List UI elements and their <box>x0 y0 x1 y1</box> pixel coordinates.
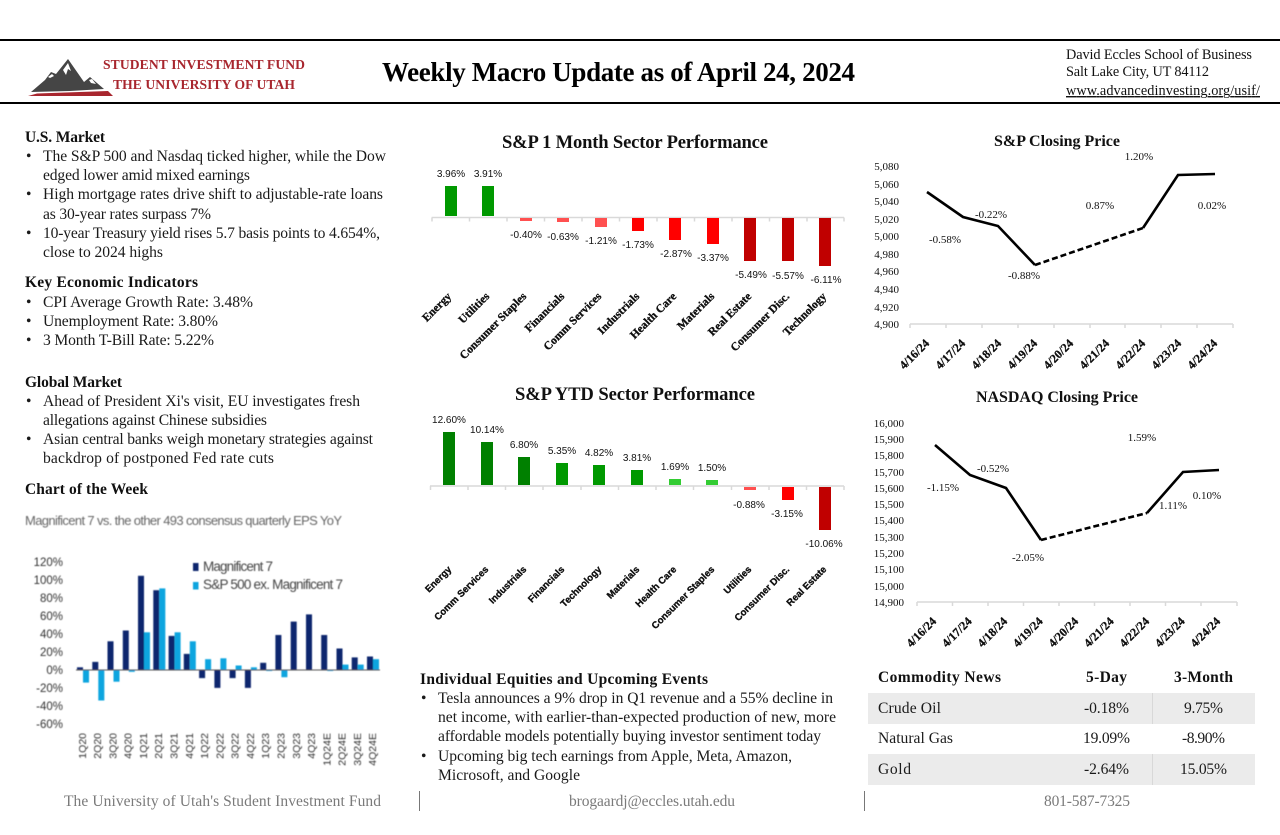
text block: Global Market: allegations against Chinese subsidies <box>43 412 267 429</box>
contact block: www.advancedinvesting.org/usif/ <box>1066 83 1260 99</box>
text block: U.S. Market: • <box>26 225 31 242</box>
bar chart: S&P YTD sector performance: -3.15% <box>771 509 803 520</box>
text block: Individual Equities and Upcoming Events: • <box>421 748 426 765</box>
table: commodity news: 3-Month <box>1174 669 1233 686</box>
table: commodity news: Crude Oil <box>878 700 942 717</box>
line chart: NASDAQ closing price: 4/17/24 <box>939 614 975 650</box>
bar chart: S&P 1 month sector performance: Utilities <box>457 290 492 326</box>
line chart: NASDAQ closing price: 15,600 <box>874 483 904 495</box>
table: commodity news: 19.09% <box>1083 730 1130 747</box>
text block: Global Market: backdrop of postponed Fed rate cuts <box>43 450 274 467</box>
line chart: S&P closing price: 5,040 <box>874 196 900 208</box>
line chart: NASDAQ closing price: 15,400 <box>874 515 904 527</box>
line chart: S&P closing price: 4/22/24 <box>1112 336 1148 372</box>
table: commodity news: 9.75% <box>1184 700 1223 717</box>
text block: U.S. Market: edged lower amid mixed earnings <box>43 167 250 184</box>
x axis quarter labels: 2Q24E <box>336 733 348 766</box>
bar chart: S&P YTD sector performance: 4.82% <box>585 448 613 459</box>
bar chart: S&P 1 month sector performance: -1.73% <box>622 240 654 251</box>
legend <box>193 559 343 592</box>
bar chart: S&P 1 month sector performance: Industrials <box>596 290 642 337</box>
line chart: S&P closing price: 4/24/24 <box>1184 336 1220 372</box>
chart: Magnificent 7 vs other 493 EPS: 20% <box>40 647 63 659</box>
bar chart: S&P YTD sector performance: Comm Services <box>432 564 491 623</box>
line chart: NASDAQ closing price: 4/19/24 <box>1010 614 1046 650</box>
table: commodity news: -8.90% <box>1182 730 1225 747</box>
line chart: NASDAQ closing price <box>874 418 1237 650</box>
line chart: S&P closing price: 4/21/24 <box>1076 336 1112 372</box>
x axis quarter labels: 4Q22 <box>245 733 257 759</box>
bar chart: S&P YTD sector performance <box>423 415 844 632</box>
bar chart: S&P YTD sector performance: 3.81% <box>623 453 651 464</box>
contact block <box>1066 47 1260 99</box>
line chart: S&P closing price: 4,940 <box>874 284 900 296</box>
bar chart: S&P YTD sector performance: 6.80% <box>510 440 538 451</box>
line chart: S&P closing price: -0.58% <box>929 234 961 246</box>
bars: S&P 500 ex. Magnificent 7 <box>83 588 379 700</box>
text block: U.S. Market: close to 2024 highs <box>43 244 163 261</box>
line chart: NASDAQ closing price: 4/18/24 <box>974 614 1010 650</box>
x axis quarter labels: 4Q23 <box>306 733 318 759</box>
x axis quarter labels: 1Q23 <box>260 733 272 759</box>
text block: U.S. Market: • <box>26 186 31 203</box>
bar chart: S&P 1 month sector performance: Comm Services <box>542 290 604 353</box>
text block: Individual Equities and Upcoming Events: Upcoming big tech earnings from Apple, Meta, Amazon, <box>438 748 792 765</box>
text block: Key Economic Indicators: • <box>26 313 31 330</box>
bar chart: S&P 1 month sector performance: -1.21% <box>585 236 617 247</box>
chart: Magnificent 7 vs other 493 EPS: 40% <box>40 629 63 641</box>
bar chart: S&P 1 month sector performance: Consumer Disc. <box>729 291 792 354</box>
line chart: NASDAQ closing price: 15,800 <box>874 450 904 462</box>
text block: Key Economic Indicators: Unemployment Rate: 3.80% <box>43 313 218 330</box>
chart: Magnificent 7 vs other 493 EPS: 60% <box>40 611 63 623</box>
bar chart: S&P YTD sector performance: Utilities <box>722 564 754 597</box>
text block: Global Market: • <box>26 393 31 410</box>
bar chart: S&P 1 month sector performance: -2.87% <box>660 249 692 260</box>
chart: Magnificent 7 vs other 493 EPS: -20% <box>36 683 63 695</box>
line chart: NASDAQ closing price: 15,300 <box>874 532 904 544</box>
heading: Chart of the Week: Chart of the Week <box>25 481 148 498</box>
text block: Global Market: Asian central banks weigh monetary strategies against <box>43 431 374 448</box>
bar chart: S&P 1 month sector performance: Materials <box>675 290 717 333</box>
x axis quarter labels: 1Q22 <box>199 733 211 759</box>
x axis quarter labels: 1Q20 <box>77 733 89 759</box>
bar chart: S&P 1 month sector performance: -5.57% <box>772 271 804 282</box>
text block: Key Economic Indicators: Key Economic Indicators <box>25 274 198 291</box>
text block: U.S. Market: as 30-year rates surpass 7% <box>43 206 211 223</box>
bar chart: S&P YTD sector performance: Energy <box>423 564 455 595</box>
line chart: S&P closing price: 4/19/24 <box>1004 336 1040 372</box>
text block: Key Economic Indicators: • <box>26 332 31 349</box>
bar chart: S&P YTD sector performance: Health Care <box>634 564 679 610</box>
text block: Individual Equities and Upcoming Events: Individual Equities and Upcoming Events <box>420 671 708 688</box>
table: commodity news: Natural Gas <box>878 730 953 747</box>
line chart: NASDAQ closing price: 4/16/24 <box>903 614 939 650</box>
line chart: NASDAQ closing price: 1.59% <box>1128 432 1156 444</box>
table: commodity news: Commodity News <box>878 669 1001 686</box>
heading: S&P Closing Price: S&P Closing Price <box>994 133 1120 150</box>
chart: Magnificent 7 vs other 493 EPS <box>25 513 380 766</box>
bar chart: S&P YTD sector performance: 10.14% <box>470 425 504 436</box>
line chart: NASDAQ closing price: 15,200 <box>874 548 904 560</box>
chart: Magnificent 7 vs other 493 EPS: 100% <box>34 575 63 587</box>
bar chart: S&P YTD sector performance: -10.06% <box>805 539 843 550</box>
legend: Magnificent 7 <box>203 559 273 574</box>
line chart: NASDAQ closing price: 4/21/24 <box>1081 614 1117 650</box>
x axis quarter labels: 2Q20 <box>92 733 104 759</box>
line chart: NASDAQ closing price: 16,000 <box>874 418 904 430</box>
table: commodity news: -0.18% <box>1084 700 1129 717</box>
line chart: NASDAQ closing price: -1.15% <box>927 482 959 494</box>
bar chart: S&P 1 month sector performance: -0.63% <box>547 232 579 243</box>
line chart: NASDAQ closing price: 4/24/24 <box>1187 614 1223 650</box>
header band <box>0 39 1280 104</box>
footer <box>64 791 1130 811</box>
bar chart: S&P 1 month sector performance: -0.40% <box>510 230 542 241</box>
bar chart: S&P 1 month sector performance: Real Estate <box>706 291 754 339</box>
x axis quarter labels: 2Q21 <box>153 733 165 759</box>
bar chart: S&P YTD sector performance: Industrials <box>487 564 529 606</box>
line chart: S&P closing price: 4,980 <box>874 249 900 261</box>
text block: U.S. Market: 10-year Treasury yield rises 5.7 basis points to 4.654%, <box>43 225 380 242</box>
bar chart: S&P YTD sector performance: 12.60% <box>432 415 466 426</box>
line chart: NASDAQ closing price: 15,900 <box>874 434 904 446</box>
text block: U.S. Market: U.S. Market <box>25 129 106 146</box>
x axis quarter labels: 4Q20 <box>122 733 134 759</box>
bar chart: S&P YTD sector performance: 1.69% <box>661 462 689 473</box>
text block: Individual Equities and Upcoming Events: net income, with earlier-than-expected production of new, more <box>438 709 836 726</box>
logo: mountain and fund name <box>28 57 305 96</box>
bar chart: S&P YTD sector performance: 1.50% <box>698 463 726 474</box>
x axis quarter labels: 4Q24E <box>367 733 379 766</box>
contact block: David Eccles School of Business <box>1066 47 1252 63</box>
line chart: NASDAQ closing price: 4/20/24 <box>1045 614 1081 650</box>
chart: Magnificent 7 vs other 493 EPS: 80% <box>40 593 63 605</box>
text block: Global Market: Global Market <box>25 374 123 391</box>
x axis quarter labels: 3Q23 <box>291 733 303 759</box>
line chart: S&P closing price: 4,900 <box>874 319 900 331</box>
bar chart: S&P YTD sector performance: Consumer Disc. <box>733 564 792 624</box>
x axis quarter labels <box>77 733 379 766</box>
heading: S&P 1 Month Sector Performance: S&P 1 Month Sector Performance <box>502 132 768 153</box>
text block: Individual Equities and Upcoming Events: Tesla announces a 9% drop in Q1 revenue and a 55% decline in <box>438 690 833 707</box>
line chart: NASDAQ closing price: 15,100 <box>874 564 904 576</box>
line chart: NASDAQ closing price: -2.05% <box>1012 552 1044 564</box>
x axis quarter labels: 3Q20 <box>108 733 120 759</box>
x axis quarter labels: 2Q22 <box>214 733 226 759</box>
contact block: Salt Lake City, UT 84112 <box>1066 64 1209 80</box>
line chart: S&P closing price: 4/16/24 <box>896 336 932 372</box>
x axis quarter labels: 3Q24E <box>352 733 364 766</box>
bar chart: S&P 1 month sector performance: Consumer Staples <box>458 290 529 362</box>
line chart: NASDAQ closing price: 14,900 <box>874 597 904 609</box>
text block: U.S. Market <box>25 129 387 261</box>
line chart: S&P closing price: -0.88% <box>1008 270 1040 282</box>
chart: Magnificent 7 vs other 493 EPS: 0% <box>46 665 63 677</box>
line chart: NASDAQ closing price: -0.52% <box>977 463 1009 475</box>
bar chart: S&P 1 month sector performance: Technology <box>781 290 829 339</box>
line chart: S&P closing price: 1.20% <box>1125 151 1153 163</box>
footer: The University of Utah's Student Investment Fund <box>64 793 381 810</box>
line chart: NASDAQ closing price: 4/22/24 <box>1116 614 1152 650</box>
logo: mountain and fund name: STUDENT INVESTMENT FUND <box>103 57 305 72</box>
bar chart: S&P YTD sector performance: Financials <box>526 564 567 605</box>
line chart: NASDAQ closing price: 4/23/24 <box>1152 614 1188 650</box>
text block: Key Economic Indicators <box>25 274 253 349</box>
x axis quarter labels: 1Q21 <box>138 733 150 759</box>
text block: Global Market: • <box>26 431 31 448</box>
bar chart: S&P YTD sector performance: Consumer Staples <box>650 564 717 632</box>
text block: Individual Equities and Upcoming Events: • <box>421 690 426 707</box>
line chart: NASDAQ closing price: 15,000 <box>874 581 904 593</box>
bar chart: S&P YTD sector performance: -0.88% <box>733 500 765 511</box>
chart: Magnificent 7 vs other 493 EPS: Magnificent 7 vs. the other 493 consensus quarterly EPS YoY <box>25 513 342 528</box>
bar chart: S&P 1 month sector performance: -6.11% <box>811 275 842 286</box>
chart: Magnificent 7 vs other 493 EPS: -60% <box>36 719 63 731</box>
title: Weekly Macro Update as of April 24, 2024 <box>382 57 855 87</box>
line chart: S&P closing price: 4/18/24 <box>968 336 1004 372</box>
table: commodity news <box>868 669 1255 785</box>
table: commodity news: Gold <box>878 761 911 778</box>
table: commodity news: 15.05% <box>1180 761 1227 778</box>
x axis quarter labels: 1Q24E <box>322 733 334 766</box>
bar chart: S&P 1 month sector performance: Financials <box>523 290 567 335</box>
footer: brogaardj@eccles.utah.edu <box>569 793 735 810</box>
line chart: S&P closing price: 4/17/24 <box>932 336 968 372</box>
line chart: S&P closing price: 0.87% <box>1086 200 1114 212</box>
text block: U.S. Market: High mortgage rates drive shift to adjustable-rate loans <box>43 186 383 203</box>
bar chart: S&P YTD sector performance: 5.35% <box>548 446 576 457</box>
text block: Individual Equities and Upcoming Events <box>420 671 836 784</box>
text block: U.S. Market: The S&P 500 and Nasdaq ticked higher, while the Dow <box>43 148 387 165</box>
x axis quarter labels: 4Q21 <box>184 733 196 759</box>
heading: S&P YTD Sector Performance: S&P YTD Sector Performance <box>515 384 755 405</box>
line chart: S&P closing price: 4/20/24 <box>1040 336 1076 372</box>
bar chart: S&P 1 month sector performance: -3.37% <box>697 253 729 264</box>
line chart: S&P closing price: 5,020 <box>874 214 900 226</box>
line chart: S&P closing price <box>874 151 1233 372</box>
x axis quarter labels: 3Q21 <box>168 733 180 759</box>
text block: Global Market <box>25 374 374 467</box>
line chart: NASDAQ closing price: 15,500 <box>874 499 904 511</box>
bar chart: S&P 1 month sector performance <box>420 169 844 362</box>
logo: mountain and fund name: THE UNIVERSITY OF UTAH <box>113 77 295 92</box>
legend: S&P 500 ex. Magnificent 7 <box>203 577 343 592</box>
heading: NASDAQ Closing Price: NASDAQ Closing Price <box>976 389 1138 406</box>
text block: Individual Equities and Upcoming Events: Microsoft, and Google <box>438 767 580 784</box>
bar chart: S&P YTD sector performance: Materials <box>605 564 642 602</box>
x axis quarter labels: 2Q23 <box>276 733 288 759</box>
bar chart: S&P YTD sector performance: Technology <box>559 564 605 610</box>
line chart: S&P closing price: -0.22% <box>975 209 1007 221</box>
bar chart: S&P 1 month sector performance: -5.49% <box>735 270 767 281</box>
chart: Magnificent 7 vs other 493 EPS: -40% <box>36 701 63 713</box>
x axis quarter labels: 3Q22 <box>230 733 242 759</box>
bar chart: S&P 1 month sector performance: 3.96% <box>437 169 465 180</box>
line chart: S&P closing price: 5,000 <box>874 231 900 243</box>
table: commodity news: -2.64% <box>1084 761 1129 778</box>
text block: Key Economic Indicators: 3 Month T-Bill Rate: 5.22% <box>43 332 214 349</box>
line chart: NASDAQ closing price: 0.10% <box>1193 490 1221 502</box>
text block: Individual Equities and Upcoming Events: affordable models potentially buying investor sentiment today <box>438 728 821 745</box>
line chart: S&P closing price: 0.02% <box>1198 200 1226 212</box>
text block: Key Economic Indicators: CPI Average Growth Rate: 3.48% <box>43 294 253 311</box>
line chart: NASDAQ closing price: 1.11% <box>1159 500 1187 512</box>
footer: 801-587-7325 <box>1044 793 1130 810</box>
text block: U.S. Market: • <box>26 148 31 165</box>
text block: Global Market: Ahead of President Xi's visit, EU investigates fresh <box>43 393 360 410</box>
bar chart: S&P 1 month sector performance: Energy <box>420 290 454 324</box>
line chart: S&P closing price: 4,920 <box>874 302 900 314</box>
line chart: S&P closing price: 4/23/24 <box>1148 336 1184 372</box>
bar chart: S&P 1 month sector performance: 3.91% <box>474 169 502 180</box>
line chart: S&P closing price: 5,080 <box>874 161 900 173</box>
table: commodity news: 5-Day <box>1086 669 1127 686</box>
bar chart: S&P YTD sector performance: Real Estate <box>785 564 829 609</box>
line chart: S&P closing price: 4,960 <box>874 266 900 278</box>
line chart: NASDAQ closing price: 15,700 <box>874 467 904 479</box>
bars: Magnificent 7 <box>77 576 373 688</box>
line chart: S&P closing price: 5,060 <box>874 179 900 191</box>
bar chart: S&P 1 month sector performance: Health Care <box>628 291 679 342</box>
chart: Magnificent 7 vs other 493 EPS: 120% <box>34 557 63 569</box>
text block: Key Economic Indicators: • <box>26 294 31 311</box>
